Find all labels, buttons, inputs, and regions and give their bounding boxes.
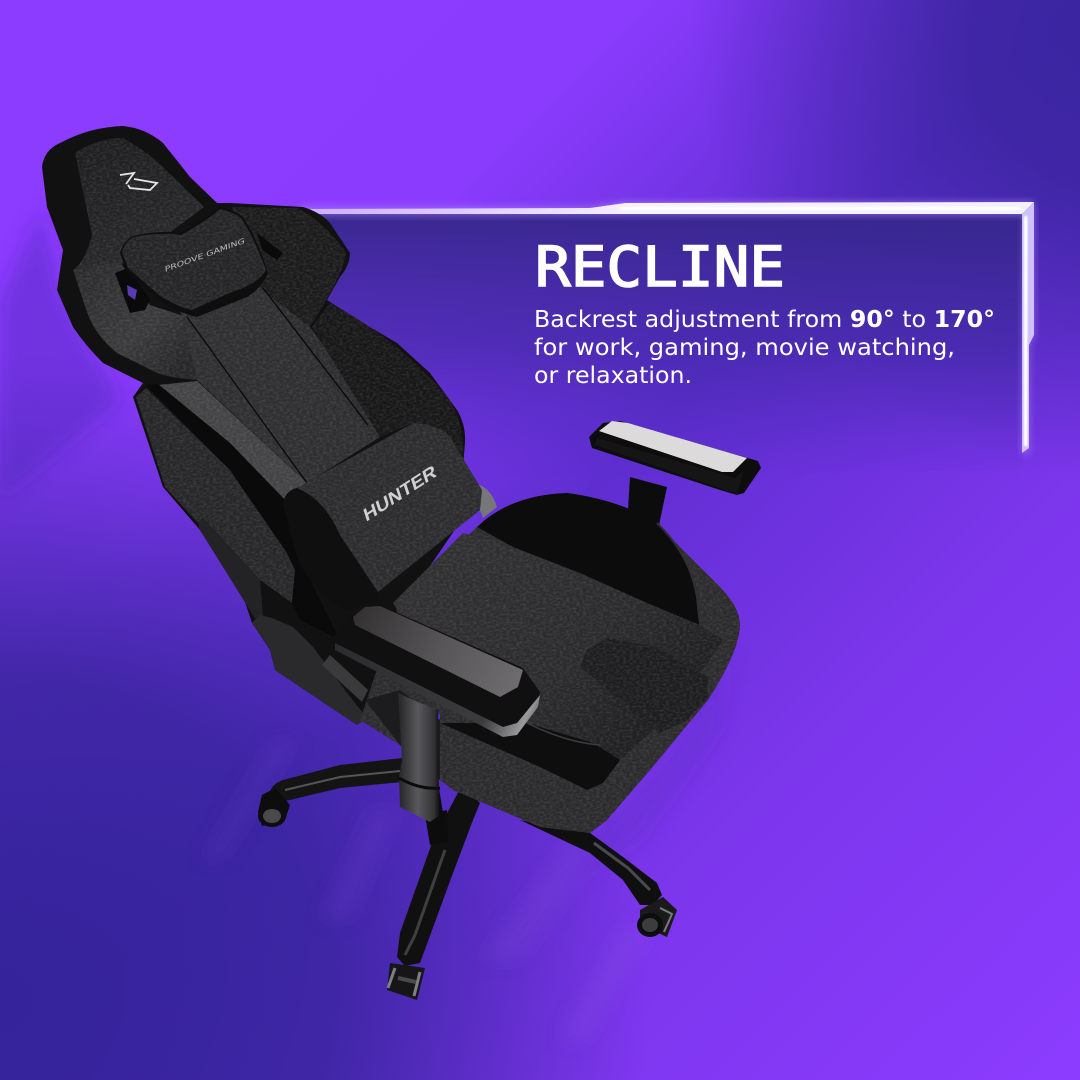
backrest (42, 126, 482, 725)
body text: or relaxation. (534, 361, 692, 389)
seat (360, 493, 740, 833)
logo mark (120, 173, 157, 190)
headrest panel (73, 138, 204, 270)
body text: Backrest adjustment from 90° to 170° (534, 305, 995, 333)
seat front shade (440, 723, 620, 790)
right inner panel (312, 303, 463, 465)
front armrest post (398, 693, 443, 822)
spine seams (187, 288, 368, 483)
left gray strip (158, 381, 307, 500)
seat top (393, 533, 723, 760)
body text (534, 305, 995, 389)
fabric panels (73, 138, 463, 603)
headrest label: PROOVE GAMING (164, 236, 245, 274)
lower bracket plate (198, 518, 283, 658)
rear armrest stem (628, 477, 667, 530)
lumbar roller (470, 483, 497, 518)
seat side under shadow (365, 690, 440, 780)
lumbar label: HUNTER (361, 460, 439, 526)
glowing frame (300, 202, 1034, 455)
body text: for work, gaming, movie watching, (534, 333, 955, 361)
right wing (232, 207, 346, 327)
base hub (425, 810, 448, 845)
heading: RECLINE (535, 235, 785, 299)
base leg: right (520, 820, 677, 937)
slot left (115, 268, 150, 313)
base leg: left (258, 758, 402, 827)
seat front cushion (580, 638, 708, 733)
translucent text panel (300, 214, 1023, 480)
rear armrest (589, 421, 761, 495)
side panel (136, 388, 295, 603)
backrest silhouette (42, 126, 482, 725)
slot right (257, 233, 283, 260)
black strip (146, 384, 340, 640)
base leg: front (387, 785, 480, 1000)
lower wing panel (73, 262, 197, 380)
spine corner panel (263, 285, 385, 440)
lumbar pillow (283, 423, 482, 610)
spine panel (180, 280, 380, 483)
chair (42, 126, 761, 1000)
seat bolster (477, 493, 700, 625)
chair motion shadow streaks (0, 210, 730, 1040)
front armrest (333, 605, 540, 737)
headrest pillow (120, 207, 268, 317)
